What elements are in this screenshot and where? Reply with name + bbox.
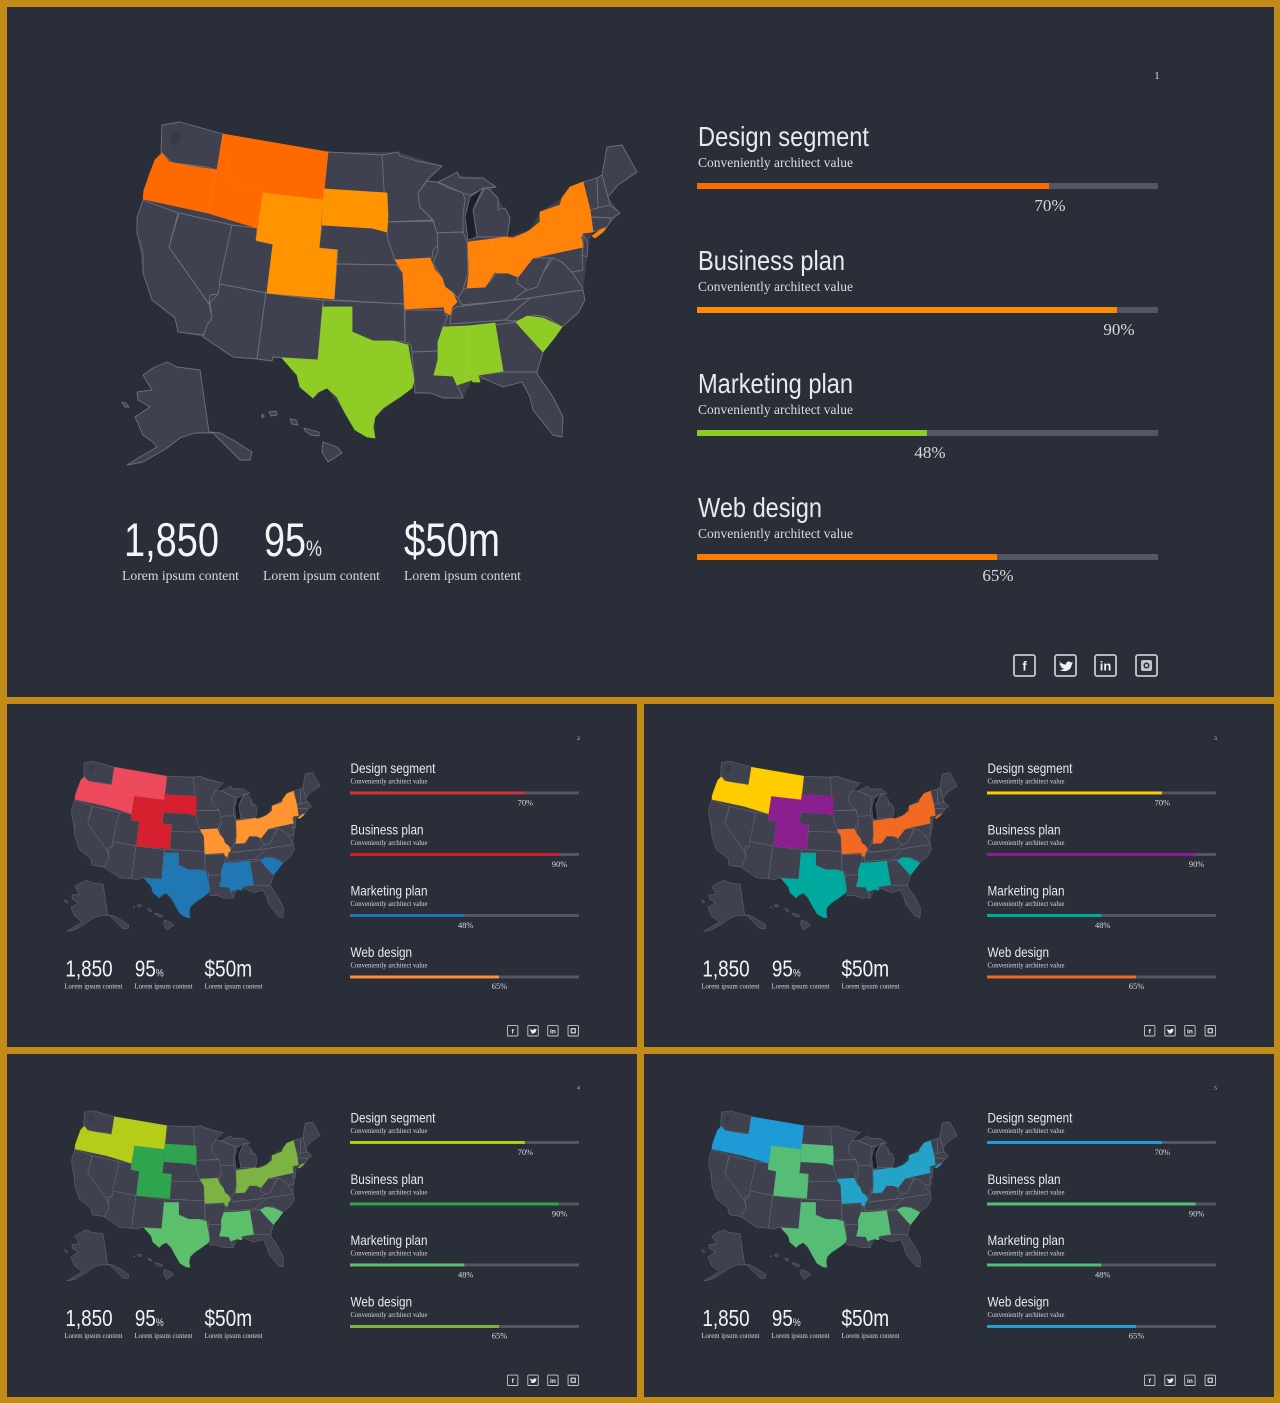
progress bars: Business plan [987, 1171, 1061, 1187]
map: United States with highlighted states [122, 122, 637, 465]
progress bars: Design segment [987, 760, 1073, 776]
slide 2 content [64, 736, 580, 1036]
progress bars: Conveniently architect value [350, 962, 427, 970]
stats: 1,850 [65, 1305, 113, 1331]
panel: slide 5 [644, 1054, 1274, 1397]
map [701, 761, 957, 931]
progress: Design segment: Conveniently architect value [698, 156, 853, 171]
progress bars: 48% [1095, 1269, 1110, 1279]
progress bars: 70% [1155, 797, 1170, 807]
progress: Design segment: 70% [1034, 196, 1066, 215]
stat: $50m: $50m [404, 513, 500, 566]
non-highlighted states [122, 122, 637, 465]
progress bars: 65% [1129, 981, 1144, 991]
progress bars: Conveniently architect value [350, 778, 427, 786]
progress bars: Marketing plan [987, 1232, 1064, 1248]
progress bars: Web design [350, 944, 412, 960]
progress bars: Marketing plan [350, 883, 427, 899]
highlighted: Missouri, Indiana, Ohio, New York [395, 182, 606, 315]
progress bars: Conveniently architect value [350, 1189, 427, 1197]
stats [701, 955, 900, 990]
stats: $50m [204, 955, 252, 981]
progress bars: Conveniently architect value [987, 962, 1064, 970]
progress: Web design: Conveniently architect value [698, 527, 853, 542]
stats: Lorem ipsum content [204, 982, 263, 990]
progress: Web design: 65% [982, 566, 1014, 585]
stats: 1,850 [702, 955, 750, 981]
stats row [122, 513, 521, 584]
icon: linkedin: in [1100, 658, 1111, 674]
panel: main slide [7, 7, 1274, 697]
progress bars: 48% [458, 1269, 473, 1279]
highlighted: Oregon, Idaho, Montana [143, 134, 328, 228]
stats: Lorem ipsum content [204, 1332, 263, 1340]
Lake Michigan [465, 188, 483, 240]
stats: % [156, 967, 164, 979]
stats: $50m [841, 1305, 889, 1331]
progress: Business plan [697, 245, 1158, 339]
progress bars: 90% [552, 859, 567, 869]
progress bars: Design segment [987, 1110, 1073, 1126]
progress bars: Conveniently architect value [987, 778, 1064, 786]
progress bars: 65% [1129, 1330, 1144, 1340]
social icons [1014, 655, 1157, 676]
stat: 95% [263, 513, 380, 584]
progress bars [987, 760, 1216, 991]
stats: 95 [772, 1305, 793, 1331]
progress bars: Conveniently architect value [987, 900, 1064, 908]
progress bars: Conveniently architect value [987, 1311, 1064, 1319]
progress: Marketing plan: Conveniently architect value [698, 403, 853, 418]
stat: 95%: % [306, 536, 322, 561]
progress bars: Conveniently architect value [987, 1189, 1064, 1197]
social icons: f [1149, 1028, 1152, 1035]
page number: 3 [1214, 736, 1217, 742]
stats [64, 955, 263, 990]
icon: twitter [1055, 655, 1076, 676]
stats: 1,850 [65, 955, 113, 981]
progress bars: Business plan [987, 822, 1061, 838]
stats: Lorem ipsum content [64, 982, 123, 990]
social icons [507, 1026, 578, 1036]
stats: Lorem ipsum content [134, 1332, 193, 1340]
progress bars [987, 1110, 1216, 1340]
progress bars: Business plan [350, 1171, 424, 1187]
stats: Lorem ipsum content [841, 1332, 900, 1340]
progress bars: Conveniently architect value [987, 1127, 1064, 1135]
progress bars: Web design [987, 944, 1049, 960]
slide 4 content [64, 1085, 580, 1385]
panel: slide 3 [644, 704, 1274, 1047]
progress bars: Web design [350, 1294, 412, 1310]
panel: slide 4 [7, 1054, 637, 1397]
progress bars: 65% [492, 1330, 507, 1340]
stats: 95 [135, 955, 156, 981]
progress bars: 90% [1189, 1208, 1204, 1218]
progress: Marketing plan [697, 368, 1158, 462]
page number: 1 [1154, 70, 1160, 82]
progress bars: Design segment [350, 760, 436, 776]
progress bars: Conveniently architect value [350, 839, 427, 847]
stats: Lorem ipsum content [134, 982, 193, 990]
progress bars: Conveniently architect value [350, 1127, 427, 1135]
page number: 5 [1214, 1085, 1217, 1091]
progress: Web design [697, 492, 1158, 585]
stats: Lorem ipsum content [841, 982, 900, 990]
progress: Business plan: 90% [1103, 320, 1135, 339]
progress bars: 90% [1189, 859, 1204, 869]
stats: 1,850 [702, 1305, 750, 1331]
progress bars: Marketing plan [350, 1232, 427, 1248]
progress bars: Conveniently architect value [350, 1311, 427, 1319]
social icons [1144, 1375, 1215, 1385]
stats: $50m [841, 955, 889, 981]
stat: 1,850: Lorem ipsum content [122, 569, 239, 584]
icon: facebook [1014, 655, 1035, 676]
progress bars: Conveniently architect value [350, 1250, 427, 1258]
highlighted: Wyoming, Colorado, South Dakota [256, 189, 388, 299]
social icons: f [1149, 1378, 1152, 1385]
page number: 2 [577, 736, 580, 742]
stat: 95%: Lorem ipsum content [263, 569, 380, 584]
progress bars: 48% [1095, 920, 1110, 930]
slide 3 content [701, 736, 1217, 1036]
panel: slide 2 [7, 704, 637, 1047]
icon: facebook: f [1022, 658, 1027, 674]
icon: instagram [1136, 655, 1157, 676]
stats: % [793, 1317, 801, 1329]
Puget Sound [171, 130, 181, 147]
stat: $50m: Lorem ipsum content [404, 569, 521, 584]
slide 5 content [701, 1085, 1217, 1385]
social icons: in [550, 1028, 556, 1035]
stats: Lorem ipsum content [771, 1332, 830, 1340]
page number: 4 [577, 1085, 580, 1091]
stats: Lorem ipsum content [64, 1332, 123, 1340]
social icons [507, 1375, 578, 1385]
progress bars: 70% [1155, 1147, 1170, 1157]
progress: Business plan: Conveniently architect value [698, 280, 853, 295]
stat: 95%: 95 [264, 513, 306, 566]
icon: linkedin [1095, 655, 1116, 676]
stats: % [156, 1317, 164, 1329]
stats: Lorem ipsum content [701, 982, 760, 990]
stats: 95 [135, 1305, 156, 1331]
progress: Business plan: Business plan [698, 245, 845, 276]
progress: Marketing plan: 48% [914, 443, 946, 462]
progress: Marketing plan: Marketing plan [698, 368, 853, 399]
progress bars: Marketing plan [987, 883, 1064, 899]
social icons: in [1187, 1028, 1193, 1035]
progress bars: Conveniently architect value [987, 839, 1064, 847]
progress bars: 65% [492, 981, 507, 991]
progress: Design segment [697, 121, 1158, 215]
social icons [1144, 1026, 1215, 1036]
map [64, 761, 320, 931]
stats [64, 1305, 263, 1340]
progress bars: Web design [987, 1294, 1049, 1310]
progress bars: Conveniently architect value [350, 900, 427, 908]
stats: 95 [772, 955, 793, 981]
progress bars: Business plan [350, 822, 424, 838]
progress: Design segment: Design segment [698, 121, 869, 152]
social icons: in [1187, 1378, 1193, 1385]
highlighted: Texas, Mississippi, Alabama, South Carolina [282, 307, 562, 438]
progress bars: Design segment [350, 1110, 436, 1126]
map [64, 1111, 320, 1281]
stats: Lorem ipsum content [771, 982, 830, 990]
social icons: f [512, 1028, 515, 1035]
progress bars [350, 1110, 579, 1340]
progress: Web design: Web design [698, 492, 822, 523]
progress bars [350, 760, 579, 991]
progress bars: 70% [518, 1147, 533, 1157]
social icons: in [550, 1378, 556, 1385]
social icons: f [512, 1378, 515, 1385]
progress bars: 48% [458, 920, 473, 930]
stats: $50m [204, 1305, 252, 1331]
map [701, 1111, 957, 1281]
stat: 1,850: 1,850 [124, 513, 219, 566]
stats: Lorem ipsum content [701, 1332, 760, 1340]
progress bars: 90% [552, 1208, 567, 1218]
stats: % [793, 967, 801, 979]
stats [701, 1305, 900, 1340]
progress bars: Conveniently architect value [987, 1250, 1064, 1258]
progress bars: 70% [518, 797, 533, 807]
